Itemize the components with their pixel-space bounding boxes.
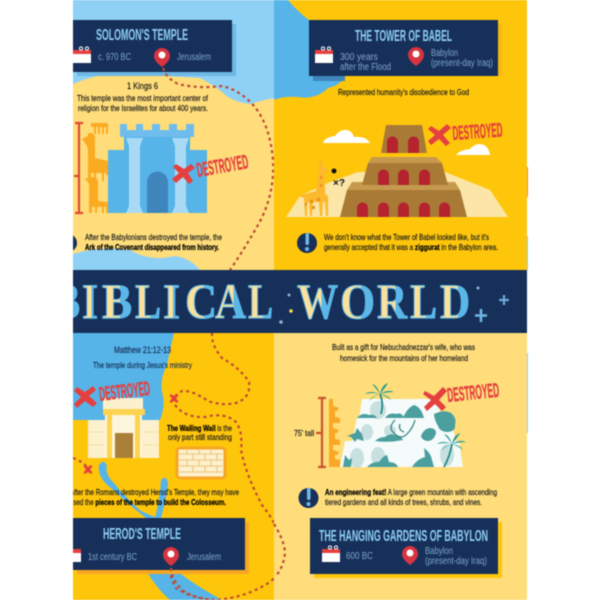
- sparkles: [279, 286, 509, 324]
- title band: [54, 270, 527, 333]
- title: WORLD: W: [297, 273, 338, 329]
- route segment: [274, 524, 285, 576]
- map: blue water: [274, 0, 345, 100]
- subtitle: The temple during Jesus's ministry: [93, 360, 193, 370]
- text block: Wailing Wall: only part still standing: [168, 432, 232, 442]
- text block: Ark of the Covenant: Ark of the Covenant disappeared from history.: [85, 242, 219, 252]
- route: dotted path: [163, 68, 273, 270]
- text block: engineering feat: tiered gardens and all kinds of trees, shrubs, and vines.: [325, 497, 482, 507]
- panel: Tower of Babel: DESTROYED: [452, 120, 503, 145]
- title: WORLD: [297, 273, 470, 329]
- destroyed stamp: [423, 380, 500, 411]
- icon: calendar: [315, 47, 333, 63]
- text block: Colosseum note: [70, 487, 239, 507]
- icon: location pin: [402, 546, 418, 565]
- header box: Hanging Gardens: Babylon: [425, 546, 453, 557]
- header box: Herod's Temple: [73, 518, 249, 574]
- text block: gift description: [332, 342, 475, 363]
- title: WORLD: O: [340, 273, 375, 329]
- height label: 75' tall: [294, 428, 314, 438]
- title: BIBLICAL: L: [135, 273, 161, 329]
- title: WORLD: D: [440, 273, 470, 329]
- icon: wailing wall bricks: [177, 448, 225, 478]
- text block: temple importance: religion for the Israelites for about 400 years.: [78, 103, 208, 113]
- header box: Herod's Temple: HEROD'S TEMPLE: [103, 526, 181, 543]
- scripture reference: Matthew 21:12-13: [114, 345, 171, 356]
- header box: Herod's Temple: 1st century BC: [88, 552, 137, 563]
- title: BIBLICAL: L: [248, 273, 273, 329]
- text block: Ark of the Covenant: After the Babylonians destroyed the temple, the: [85, 232, 222, 242]
- icon: calendar: [322, 546, 340, 562]
- header box: Tower of Babel: after the Flood: [340, 62, 391, 73]
- doors: [357, 136, 450, 217]
- title: BIBLICAL: C: [185, 273, 217, 329]
- icon: confused giraffe: [298, 160, 345, 216]
- text block: Ark of the Covenant: [85, 232, 222, 252]
- title: BIBLICAL: B: [54, 273, 80, 329]
- panel: Hanging Gardens of Babylon: DESTROYED: [446, 380, 500, 407]
- panel: Hanging Gardens of Babylon: [274, 333, 527, 600]
- text block: ziggurat note: [324, 232, 498, 252]
- icon: location pin: [163, 547, 179, 566]
- map: Red Sea gulfs: [99, 462, 222, 600]
- scripture reference: 1 Kings 6: [127, 81, 158, 91]
- icon: location pin: [408, 47, 424, 66]
- icon: calendar: [73, 47, 91, 63]
- header box: Tower of Babel: [309, 20, 502, 81]
- panel: Tower of Babel: [274, 0, 527, 270]
- header box: Solomon's Temple: [73, 20, 236, 76]
- vines: [391, 420, 415, 437]
- height ruler: [74, 123, 83, 213]
- text block: gift description: Built as a gift for Nebuchadnezzar's wife, who was: [332, 342, 475, 352]
- icon: confused giraffe: ×?: [333, 178, 345, 189]
- illustration: ziggurat tower: [340, 125, 467, 217]
- text block: engineering feat: An engineering feat! A large green mountain with ascending: [325, 487, 497, 497]
- markers: [84, 394, 178, 474]
- icon: location pin: [154, 48, 170, 67]
- header box: Herod's Temple: Jerusalem: [187, 552, 221, 563]
- routes: dotted path: [73, 333, 285, 600]
- illustration: Solomon's Temple building: [108, 124, 207, 213]
- icon: exclamation: [298, 488, 318, 508]
- foliage light: [350, 401, 454, 468]
- icon: exclamation: [297, 233, 317, 253]
- header box: Tower of Babel: 300 years: [340, 52, 378, 63]
- illustration: Herod's Temple building: [88, 398, 159, 458]
- title: WORLD: R: [377, 273, 408, 329]
- map: sand land: [73, 74, 274, 270]
- subtitle: Represented humanity's disobedience to God: [338, 87, 469, 97]
- header box: Hanging Gardens: 600 BC: [346, 551, 373, 562]
- text block: Colosseum note: After the Romans destroyed Herod's Temple, they may have: [70, 487, 239, 497]
- palm trees: [365, 383, 466, 451]
- icon: calendar: [73, 549, 81, 562]
- title: BIBLICAL: B: [102, 273, 132, 329]
- panel: Herod's Temple: DESTROYED: [98, 378, 151, 406]
- foliage dark: [343, 405, 456, 467]
- header box: Hanging Gardens: (present-day Iraq): [425, 556, 487, 567]
- header box: Solomon's Temple: c. 970 BC: [98, 52, 131, 63]
- destroyed stamp: [172, 151, 250, 184]
- panel: Solomon's Temple: DESTROYED: [195, 151, 250, 182]
- title: BIBLICAL: A: [215, 273, 246, 329]
- text block: temple importance: [77, 93, 209, 113]
- text block: ziggurat note: generally accepted that it was a ziggurat in the Babylon area.: [324, 242, 498, 252]
- callout icon partial: [59, 234, 77, 252]
- title: BIBLICAL: I: [82, 273, 98, 329]
- background hills: [286, 172, 508, 217]
- destroyed stamp: [428, 120, 503, 146]
- destroyed stamp: [74, 378, 151, 408]
- icon: stacked giraffes: [329, 399, 340, 467]
- text block: Wailing Wall: The Wailing Wall is the: [167, 423, 232, 433]
- title: BIBLICAL: I: [163, 273, 180, 329]
- icon: stacked giraffes: [82, 123, 108, 213]
- panel: Herod's Temple: [70, 333, 285, 600]
- header box: Tower of Babel: THE TOWER OF BABEL: [355, 28, 452, 45]
- clouds: [323, 130, 490, 155]
- title: WORLD: L: [410, 273, 437, 329]
- header box: Solomon's Temple: Jerusalem: [177, 52, 211, 63]
- header box: Hanging Gardens: [310, 518, 502, 578]
- illustration: hanging gardens: [340, 383, 466, 468]
- text block: Colosseum note: used the pieces of the temple to build the Colosseum.: [70, 497, 226, 507]
- text block: gift description: homesick for the mountains of her homeland: [340, 353, 468, 363]
- height ruler: [316, 398, 326, 467]
- route: below pin: [171, 568, 212, 600]
- text block: engineering feat: [325, 487, 497, 507]
- panel: Solomon's Temple: [59, 0, 274, 270]
- header box: Tower of Babel: Babylon: [431, 48, 458, 59]
- title: BIBLICAL: [54, 273, 273, 329]
- text block: ziggurat note: We don't know what the Tower of Babel looked like, but it's: [324, 232, 489, 242]
- text block: temple importance: This temple was the most important center of: [77, 93, 209, 103]
- text block: Wailing Wall: [167, 423, 232, 442]
- map: blue water: [73, 333, 174, 420]
- header box: Solomon's Temple: SOLOMON'S TEMPLE: [96, 27, 188, 44]
- header box: Tower of Babel: (present-day Iraq): [431, 58, 493, 69]
